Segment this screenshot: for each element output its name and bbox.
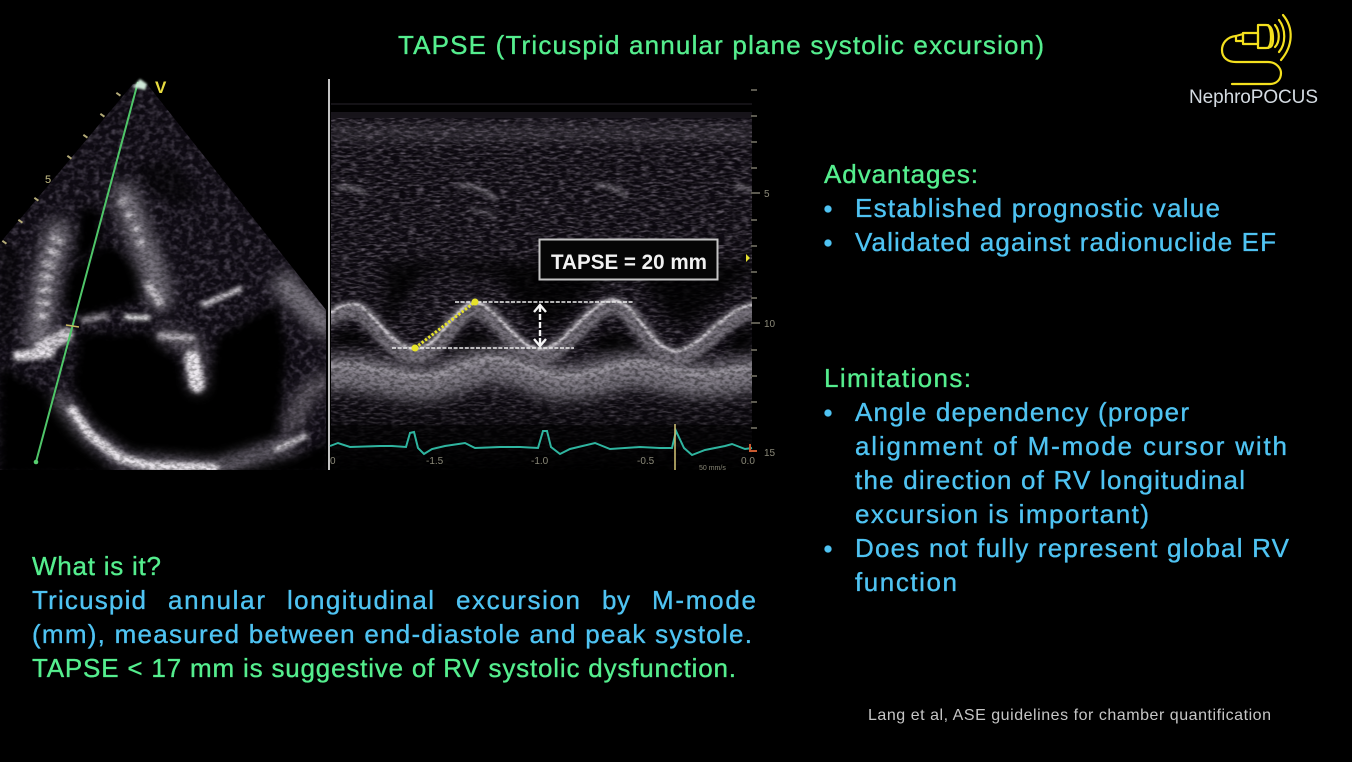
- ECG trace: [330, 424, 752, 470]
- echo image: apical four-chamber view: [0, 78, 330, 475]
- limitations list: [824, 397, 1290, 597]
- orientation marker V: V: [155, 78, 167, 97]
- advantages list: Validated against radionuclide EF: [855, 227, 1276, 257]
- double arrow: [534, 305, 546, 346]
- limitations list: function: [855, 567, 957, 597]
- citation: Lang et al, ASE guidelines for chamber quantification: [868, 707, 1271, 724]
- limitations list: Angle dependency (proper: [855, 397, 1189, 427]
- M-mode cursor line: [34, 79, 147, 464]
- depth markers: [2, 92, 121, 245]
- logo wordmark: NephroPOCUS: [1189, 87, 1318, 108]
- title: TAPSE (Tricuspid annular plane systolic excursion): [398, 30, 1044, 60]
- definition text: M-mode: [652, 585, 756, 615]
- definition text: by: [602, 585, 630, 615]
- measurement lines: [392, 302, 633, 348]
- cutoff text: TAPSE < 17 mm is suggestive of RV systolic dysfunction.: [32, 653, 736, 683]
- depth scale: 5: [764, 189, 770, 200]
- limitations list: Does not fully represent global RV: [855, 533, 1290, 563]
- definition text: Tricuspid: [32, 585, 146, 615]
- time axis: 0.0: [741, 456, 755, 467]
- limitations list: the direction of RV longitudinal: [855, 465, 1245, 495]
- definition text: annular: [168, 585, 265, 615]
- panel: advantages: [824, 159, 1276, 257]
- definition text: longitudinal: [287, 585, 434, 615]
- M-mode image: [320, 79, 776, 472]
- definition text: excursion: [456, 585, 580, 615]
- depth scale: 10: [764, 319, 776, 330]
- limitations list: alignment of M-mode cursor with: [855, 431, 1287, 461]
- logo: NephroPOCUS: [1189, 15, 1318, 108]
- image left edge: [328, 79, 330, 470]
- sector image: [0, 80, 330, 475]
- time axis: [330, 456, 755, 472]
- time axis: 0: [330, 456, 336, 467]
- text block: what is it: [32, 551, 756, 683]
- depth markers: 5: [45, 174, 51, 186]
- limitations list: excursion is important): [855, 499, 1149, 529]
- time axis: 50 mm/s: [699, 465, 726, 472]
- depth scale: 15: [764, 448, 776, 459]
- heading: advantages: Advantages:: [824, 159, 978, 189]
- heading: what is it: What is it?: [32, 551, 161, 581]
- advantages list: [824, 193, 1276, 257]
- advantages list: Established prognostic value: [855, 193, 1220, 223]
- M-mode trace: [320, 103, 760, 470]
- time axis: -1.5: [426, 456, 444, 467]
- definition text: [32, 585, 756, 649]
- definition text: (mm), measured between end-diastole and peak systole.: [32, 619, 752, 649]
- panel: limitations: [824, 363, 1290, 597]
- slope line: [412, 298, 478, 352]
- time axis: -1.0: [531, 456, 549, 467]
- heading: limitations: Limitations:: [824, 363, 971, 393]
- TAPSE label: [540, 240, 718, 280]
- icon: ultrasound probe: [1222, 15, 1291, 84]
- time axis: -0.5: [637, 456, 655, 467]
- depth scale: [746, 89, 776, 459]
- TAPSE label: TAPSE = 20 mm: [551, 251, 707, 274]
